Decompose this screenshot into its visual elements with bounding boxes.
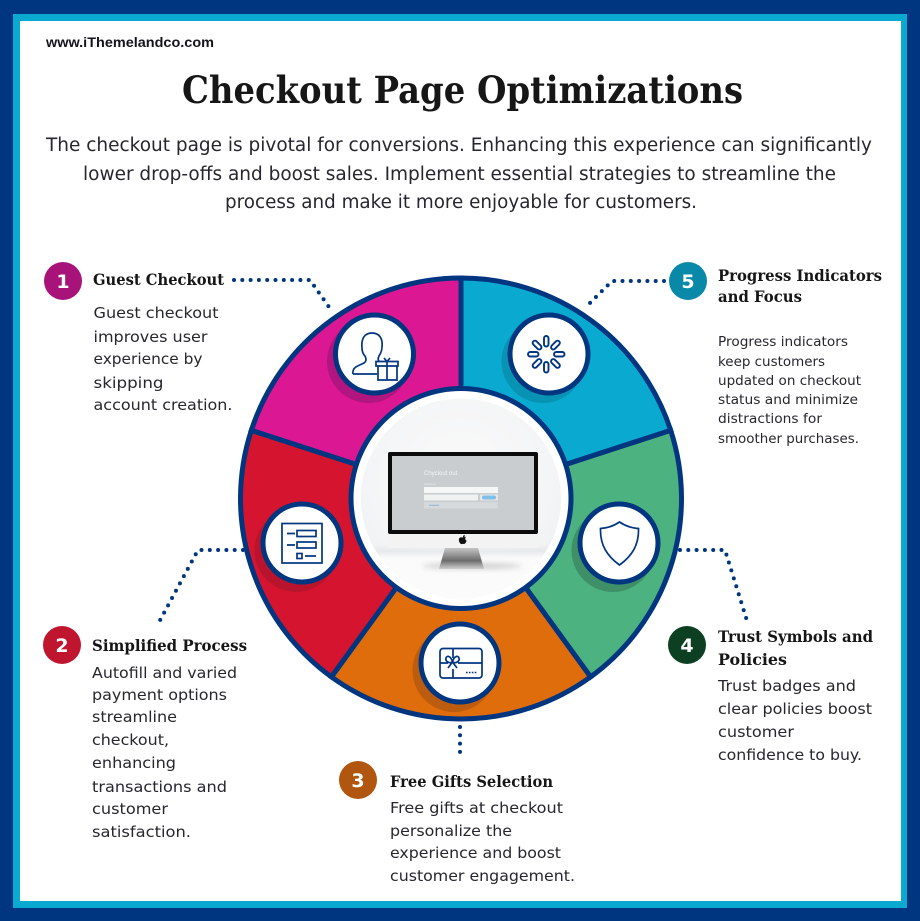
body 3: personalize the xyxy=(390,822,512,840)
body 2: satisfaction. xyxy=(92,823,191,841)
heading 3: Free Gifts Selection xyxy=(390,772,553,791)
connector: item 5 xyxy=(585,281,664,308)
body 1: improves user xyxy=(94,328,208,346)
number badge 3 xyxy=(339,761,377,799)
connector: item 1 xyxy=(234,280,329,307)
panel: free gifts selection xyxy=(339,761,575,885)
body 2: checkout, xyxy=(92,731,169,749)
center photo: desktop monitor: Chyclout out xyxy=(424,471,458,477)
panel: simplified process xyxy=(43,626,247,841)
body 5: smoother purchases. xyxy=(718,432,859,447)
intro text xyxy=(45,135,872,213)
number badge 5: 5 xyxy=(681,271,695,293)
segment: trust symbols xyxy=(461,430,681,677)
segment: progress indicators xyxy=(461,278,671,498)
panel: trust symbols and policies xyxy=(668,626,873,764)
body 5: keep customers xyxy=(718,355,825,370)
heading 2: Simplified Process xyxy=(92,636,247,655)
number badge 1 xyxy=(44,262,82,300)
heading 4: Trust Symbols and xyxy=(718,627,873,646)
connector: item 4 xyxy=(680,550,748,624)
connector: item 2 xyxy=(158,550,243,624)
body 1: account creation. xyxy=(94,396,232,414)
body 4: Trust badges and xyxy=(717,677,856,695)
body 5: updated on checkout xyxy=(718,374,861,389)
body 5: Progress indicators xyxy=(718,335,848,350)
body 5: status and minimize xyxy=(718,393,858,408)
heading 4: Policies xyxy=(718,650,787,669)
body 4 xyxy=(717,677,872,764)
icon badge: checkout form xyxy=(254,504,341,592)
number badge 2 xyxy=(43,626,81,664)
heading 1: Guest Checkout xyxy=(93,270,225,289)
body 5 xyxy=(718,335,861,447)
body 3: customer engagement. xyxy=(390,867,575,885)
heading 5: and Focus xyxy=(718,287,802,306)
body 4: confidence to buy. xyxy=(718,746,862,764)
number badge 1: 1 xyxy=(56,271,70,293)
connector: item 3 xyxy=(458,727,462,755)
intro text: process and make it more enjoyable for customers. xyxy=(225,192,697,213)
title: Checkout Page Optimizations xyxy=(182,68,743,112)
body 4: clear policies boost xyxy=(718,700,872,718)
icon badge: gift card xyxy=(412,624,499,712)
body 2: streamline xyxy=(92,708,177,726)
body 2: customer xyxy=(92,800,169,818)
icon badge: shield xyxy=(572,504,658,592)
number badge 5 xyxy=(669,262,707,300)
body 2: enhancing xyxy=(92,754,176,772)
body 1: Guest checkout xyxy=(94,304,218,322)
body 3 xyxy=(390,799,575,885)
body 2 xyxy=(92,664,237,841)
number badge 4 xyxy=(668,626,706,664)
body 1: skipping xyxy=(94,374,164,392)
segment: simplified process xyxy=(241,430,461,677)
body 1: experience by xyxy=(94,350,202,368)
body 1 xyxy=(94,304,232,414)
body 2: Autofill and varied xyxy=(92,664,237,682)
website url: www.iThemelandco.com xyxy=(45,34,214,50)
heading 5: Progress Indicators xyxy=(718,266,882,285)
body 3: Free gifts at checkout xyxy=(390,799,563,817)
body 2: transactions and xyxy=(92,778,227,796)
center photo: desktop monitor xyxy=(351,388,571,608)
body 3: experience and boost xyxy=(390,844,561,862)
icon badge: person with gift xyxy=(327,315,414,403)
body 4: customer xyxy=(718,723,795,741)
icon badge: loading spinner xyxy=(502,315,588,403)
segment: free gifts xyxy=(331,498,591,719)
intro text: lower drop-offs and boost sales. Implement essential strategies to streamline the xyxy=(83,164,836,185)
number badge 2: 2 xyxy=(55,635,69,657)
heading 5 xyxy=(718,266,882,306)
heading 4 xyxy=(718,627,873,669)
segment: guest checkout xyxy=(251,278,461,498)
panel: guest checkout xyxy=(44,262,232,414)
number badge 4: 4 xyxy=(680,635,694,657)
panel: progress indicators and focus xyxy=(669,262,882,447)
number badge 3: 3 xyxy=(351,770,365,792)
body 5: distractions for xyxy=(718,412,823,427)
body 2: payment options xyxy=(92,686,227,704)
center photo: desktop monitor: Checkout xyxy=(424,482,436,486)
intro text: The checkout page is pivotal for conversions. Enhancing this experience can significantly xyxy=(45,135,872,156)
wheel diagram xyxy=(241,278,681,719)
